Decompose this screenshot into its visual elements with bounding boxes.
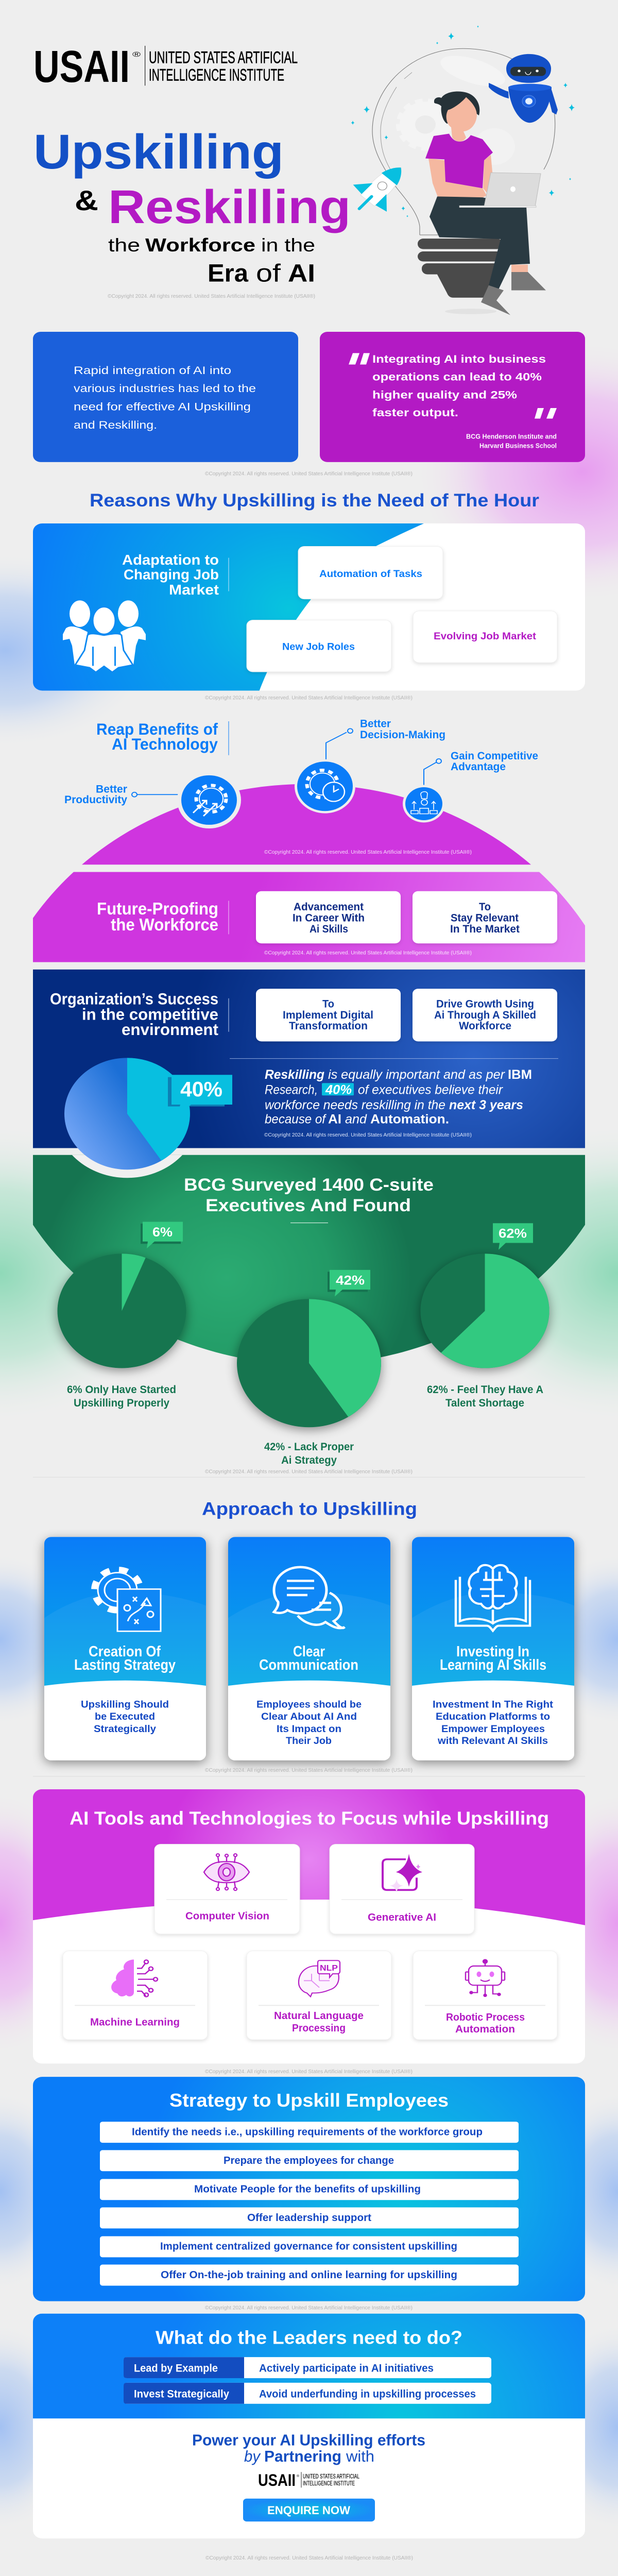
card: machine learning <box>63 1951 208 2040</box>
call to action text <box>192 2431 425 2465</box>
heading: Reap Benefits of <box>96 721 218 738</box>
heading <box>96 721 218 754</box>
card description: Strategically <box>94 1723 156 1734</box>
card: digital transformation: Transformation <box>289 1019 368 1032</box>
callout: 62% <box>491 1223 533 1250</box>
button: enquire now <box>243 2499 375 2521</box>
card: drive growth: Drive Growth Using <box>436 997 534 1010</box>
call to action text: Partnering <box>264 2448 341 2465</box>
reskilling paragraph: 40% <box>325 1082 352 1097</box>
panel: intro text: need for effective AI Upskilling <box>74 400 251 413</box>
logo: USAII small: INTELLIGENCE INSTITUTE <box>303 2480 355 2487</box>
callout: 42%: 42% <box>336 1273 365 1287</box>
panel: intro text: and Reskilling. <box>74 418 157 431</box>
card: investing in learning AI skills <box>412 1537 574 1760</box>
rocket <box>341 154 418 223</box>
card: advancement in career: Advancement <box>294 900 364 913</box>
purple arc <box>81 784 531 865</box>
icon: robot <box>466 1960 505 1996</box>
strategy list: Identify the needs i.e., upskilling requirements of the workforce group <box>132 2126 483 2138</box>
icon: brain over book <box>456 1565 530 1631</box>
pie labels: 6% Only Have Started <box>67 1383 176 1396</box>
strategy list <box>100 2122 519 2285</box>
reskilling paragraph: is equally important and as per <box>328 1067 505 1082</box>
title: of <box>256 259 281 287</box>
panel: intro text: Rapid integration of AI into <box>74 364 231 377</box>
row: lead by example: Lead by Example <box>134 2362 218 2374</box>
row: lead by example <box>124 2357 491 2378</box>
card: stay relevant: Stay Relevant <box>451 911 519 924</box>
logo: USAII small: USAII <box>258 2471 296 2489</box>
card heading: Clear <box>293 1644 325 1660</box>
card: computer vision <box>154 1844 300 1934</box>
pie chart: 42% <box>237 1299 381 1427</box>
reskilling paragraph: and <box>345 1112 367 1126</box>
card: stay relevant: In The Market <box>450 922 520 935</box>
heading: AI Tools and Technologies to Focus while Upskilling <box>70 1808 549 1829</box>
card description: with Relevant AI Skills <box>437 1735 548 1747</box>
card: evolving job market <box>413 611 557 663</box>
card: advancement in career: Ai Skills <box>310 922 348 935</box>
panel: BCG quote: operations can lead to 40% <box>372 370 542 383</box>
panel heading <box>122 552 219 598</box>
benefit: gain competitive advantage <box>403 749 538 822</box>
card description: be Executed <box>95 1711 155 1722</box>
card heading <box>440 1644 546 1673</box>
panel: intro text: various industries has led to the <box>74 382 256 395</box>
callout: 6%: 6% <box>152 1225 173 1240</box>
icon: speech bubbles <box>274 1567 345 1628</box>
icon: NLP brain: NLP <box>320 1963 338 1973</box>
logo: USAII small: UNITED STATES ARTIFICIAL <box>303 2473 359 2480</box>
card: drive growth: Workforce <box>459 1019 511 1032</box>
logo: USAII small: ® <box>297 2474 299 2478</box>
pie labels <box>67 1383 543 1466</box>
card: evolving job market: Evolving Job Market <box>434 631 536 642</box>
reskilling paragraph: next 3 years <box>449 1097 523 1112</box>
heading <box>97 900 218 935</box>
panel: strategy to upskill employees <box>33 2077 585 2301</box>
copyright: ©Copyright 2024. All rights reserved. United States Artificial Intelligence Institute (USAII®) <box>205 471 413 477</box>
heading <box>50 990 218 1039</box>
heading: environment <box>122 1021 218 1039</box>
title <box>33 125 351 287</box>
quote source: Harvard Business School <box>479 442 557 449</box>
call to action text: with <box>346 2448 374 2465</box>
callout: 6% <box>141 1222 183 1248</box>
reskilling paragraph: AI <box>328 1112 341 1126</box>
laptop <box>459 173 541 208</box>
benefit: better productivity <box>64 772 241 828</box>
card description: Its Impact on <box>277 1723 341 1734</box>
title: & <box>75 185 98 216</box>
pie labels: 62% - Feel They Have A <box>427 1383 543 1396</box>
heading: Strategy to Upskill Employees <box>169 2090 449 2111</box>
heading: Executives And Found <box>205 1195 411 1215</box>
card: drive growth: Ai Through A Skilled <box>434 1008 536 1021</box>
reskilling paragraph: of executives believe their <box>358 1082 503 1097</box>
panel heading: Market <box>169 582 219 598</box>
pie chart: 6% <box>58 1253 186 1368</box>
benefit: gain competitive advantage: Advantage <box>451 760 506 773</box>
callout: 42% <box>328 1270 370 1296</box>
card heading: Learning AI Skills <box>440 1657 546 1673</box>
panel: BCG quote: Integrating AI into business <box>372 352 546 365</box>
card: digital transformation: Implement Digital <box>283 1008 373 1021</box>
callout: 62%: 62% <box>499 1226 527 1241</box>
benefit: better decision-making: Better <box>360 717 391 730</box>
card: creation of lasting strategy <box>44 1537 206 1760</box>
logo: USAII: UNITED STATES ARTIFICIAL <box>149 48 298 67</box>
copyright: ©Copyright 2024. All rights reserved. United States Artificial Intelligence Institute (USAII®) <box>264 951 472 956</box>
heading <box>184 1175 434 1215</box>
connectors <box>132 728 441 797</box>
card: computer vision: Computer Vision <box>185 1910 269 1922</box>
reskilling paragraph: Reskilling <box>265 1067 324 1082</box>
card: machine learning: Machine Learning <box>90 2016 180 2028</box>
card description: Clear About AI And <box>261 1711 357 1722</box>
panel: what do the leaders need to do <box>33 2314 585 2538</box>
panel heading: Changing Job <box>124 567 219 583</box>
benefit: better decision-making <box>295 717 445 814</box>
logo: USAII small <box>258 2471 359 2489</box>
illustration: woman with laptop in light bulb, robot and rocket <box>341 25 575 315</box>
heading: AI Technology <box>112 736 218 754</box>
copyright: ©Copyright 2024. All rights reserved. United States Artificial Intelligence Institute (USAII®) <box>108 294 315 299</box>
title: Workforce <box>145 235 255 256</box>
benefit: better productivity: Better <box>96 783 127 795</box>
woman <box>425 91 546 315</box>
copyright: ©Copyright 2024. All rights reserved. United States Artificial Intelligence Institute (USAII®) <box>205 2555 413 2561</box>
card: digital transformation: To <box>322 997 334 1010</box>
card: drive growth <box>413 989 557 1041</box>
panel: BCG quote: faster output. <box>372 406 458 419</box>
icon: brain with circuits <box>111 1960 158 1997</box>
panel: BCG quote <box>320 332 585 462</box>
bulb glass and pale shapes <box>372 48 555 235</box>
card heading: Lasting Strategy <box>74 1657 176 1673</box>
card description: Employees should be <box>256 1699 362 1710</box>
card description: Upskilling Should <box>81 1699 169 1710</box>
card heading: Communication <box>259 1657 358 1673</box>
icon: opening quote marks <box>349 353 370 365</box>
card description: Investment In The Right <box>433 1699 553 1710</box>
reskilling paragraph: workforce needs reskilling in the <box>265 1097 445 1112</box>
pie chart: 62% <box>420 1253 550 1368</box>
icon: sparkles in frame <box>383 1854 422 1892</box>
pie labels: 42% - Lack Proper <box>264 1440 354 1453</box>
strategy list: Offer On-the-job training and online learning for upskilling <box>161 2268 457 2281</box>
heading: approach: Approach to Upskilling <box>202 1499 417 1519</box>
row: invest strategically: Avoid underfunding in upskilling processes <box>259 2387 476 2400</box>
card: stay relevant <box>413 891 557 943</box>
benefit: better productivity: Productivity <box>64 793 127 806</box>
panel: organization's success <box>33 970 585 1148</box>
strategy list: Motivate People for the benefits of upskilling <box>194 2183 421 2195</box>
card: natural language processing <box>247 1951 391 2040</box>
card heading <box>74 1644 176 1673</box>
heading: in the competitive <box>82 1006 218 1024</box>
reskilling paragraph: IBM <box>508 1067 532 1082</box>
pie labels: Talent Shortage <box>445 1396 524 1409</box>
card description: Empower Employees <box>441 1723 545 1734</box>
copyright: ©Copyright 2024. All rights reserved. United States Artificial Intelligence Institute (USAII®) <box>205 2069 413 2075</box>
card: automation of tasks <box>298 546 443 599</box>
panel heading: Adaptation to <box>122 552 219 568</box>
card heading: Investing In <box>456 1644 529 1660</box>
title: AI <box>288 259 315 287</box>
card: robotic process automation: Robotic Process <box>446 2011 525 2023</box>
title: the <box>108 235 140 256</box>
copyright: ©Copyright 2024. All rights reserved. United States Artificial Intelligence Institute (USAII®) <box>205 696 413 701</box>
card: new job roles: New Job Roles <box>282 641 355 652</box>
heading: reasons: Reasons Why Upskilling is the Need of The Hour <box>90 490 539 511</box>
pie chart: 40% reskilling <box>64 1058 190 1170</box>
copyright: ©Copyright 2024. All rights reserved. United States Artificial Intelligence Institute (USAII®) <box>205 2306 413 2311</box>
button: enquire now: ENQUIRE NOW <box>267 2504 351 2517</box>
title: Upskilling <box>33 125 284 179</box>
icon: closing quote marks <box>535 408 557 418</box>
copyright: ©Copyright 2024. All rights reserved. United States Artificial Intelligence Institute (USAII®) <box>205 1469 413 1475</box>
reskilling paragraph: Research, <box>265 1082 318 1097</box>
icon: gear and strategy board <box>95 1570 161 1631</box>
pie labels: Ai Strategy <box>281 1453 337 1466</box>
benefit: gain competitive advantage: Gain Competitive <box>451 749 538 761</box>
card: new job roles <box>247 620 391 672</box>
panel: adaptation to changing job market <box>33 523 585 691</box>
card description <box>433 1699 553 1747</box>
panel: AI tools and technologies <box>33 1789 585 2063</box>
pie labels: Upskilling Properly <box>74 1396 169 1409</box>
card: natural language processing: Natural Language <box>274 2009 364 2022</box>
card: generative AI: Generative AI <box>368 1911 436 1923</box>
logo: USAII: INTELLIGENCE INSTITUTE <box>149 66 284 84</box>
robot <box>489 54 558 123</box>
heading: the Workforce <box>111 916 218 935</box>
panel: reap benefits of AI technology <box>0 717 618 1359</box>
callout: 40% <box>168 1075 232 1115</box>
card description: Education Platforms to <box>436 1711 550 1722</box>
logo: USAII: USAII <box>33 41 130 92</box>
benefit: better decision-making: Decision-Making <box>360 728 445 741</box>
quote source <box>466 433 557 449</box>
card: automation of tasks: Automation of Tasks <box>319 568 422 580</box>
quote source: BCG Henderson Institute and <box>466 433 557 440</box>
reskilling paragraph <box>265 1067 532 1126</box>
row: invest strategically: Invest Strategically <box>134 2387 229 2400</box>
logo: USAII: ® <box>132 50 141 59</box>
title: Era <box>208 259 249 287</box>
strategy list: Offer leadership support <box>247 2211 371 2224</box>
reskilling paragraph: Automation. <box>370 1112 449 1126</box>
heading: Organization’s Success <box>50 990 218 1008</box>
strategy list: Prepare the employees for change <box>224 2154 394 2166</box>
copyright: ©Copyright 2024. All rights reserved. United States Artificial Intelligence Institute (USAII®) <box>205 1768 413 1773</box>
logo: USAII <box>33 41 298 92</box>
row: invest strategically <box>124 2383 491 2404</box>
heading: What do the Leaders need to do? <box>156 2327 462 2348</box>
copyright: ©Copyright 2024. All rights reserved. United States Artificial Intelligence Institute (USAII®) <box>264 850 472 855</box>
card description <box>256 1699 362 1747</box>
card: robotic process automation: Automation <box>455 2023 515 2035</box>
row: lead by example: Actively participate in AI initiatives <box>259 2362 434 2374</box>
card: clear communication <box>228 1537 390 1760</box>
call to action text: Power your AI Upskilling efforts <box>192 2431 425 2449</box>
shadow under feet <box>445 309 496 314</box>
reskilling paragraph: because of <box>265 1112 327 1126</box>
panel: BCG quote: higher quality and 25% <box>372 388 517 401</box>
icon: eye <box>204 1854 249 1890</box>
icon: people <box>63 600 146 672</box>
card: stay relevant: To <box>479 900 491 913</box>
title: Reskilling <box>108 180 351 233</box>
heading: BCG Surveyed 1400 C-suite <box>184 1175 434 1195</box>
copyright: ©Copyright 2024. All rights reserved. United States Artificial Intelligence Institute (USAII®) <box>264 1133 472 1138</box>
card description <box>81 1699 169 1734</box>
panel: intro text <box>33 332 298 462</box>
card: advancement in career <box>256 891 401 943</box>
heading: Future-Proofing <box>97 900 218 919</box>
call to action text: by <box>244 2448 261 2465</box>
card heading: Creation Of <box>89 1644 161 1660</box>
card heading <box>259 1644 358 1673</box>
card: robotic process automation <box>413 1951 557 2040</box>
card: generative AI <box>330 1844 474 1934</box>
icon: NLP brain <box>299 1960 340 1997</box>
card: digital transformation <box>256 989 401 1041</box>
strategy list: Implement centralized governance for consistent upskilling <box>160 2240 457 2252</box>
panel: BCG survey <box>33 1155 585 1466</box>
sparkles <box>351 25 575 217</box>
card: advancement in career: In Career With <box>293 911 365 924</box>
panel: future-proofing the workforce <box>33 872 585 962</box>
bulb base <box>418 239 503 298</box>
callout: 40%: 40% <box>180 1078 222 1101</box>
card: natural language processing: Processing <box>292 2022 346 2034</box>
card description: Their Job <box>286 1735 332 1747</box>
title: in the <box>261 235 315 256</box>
